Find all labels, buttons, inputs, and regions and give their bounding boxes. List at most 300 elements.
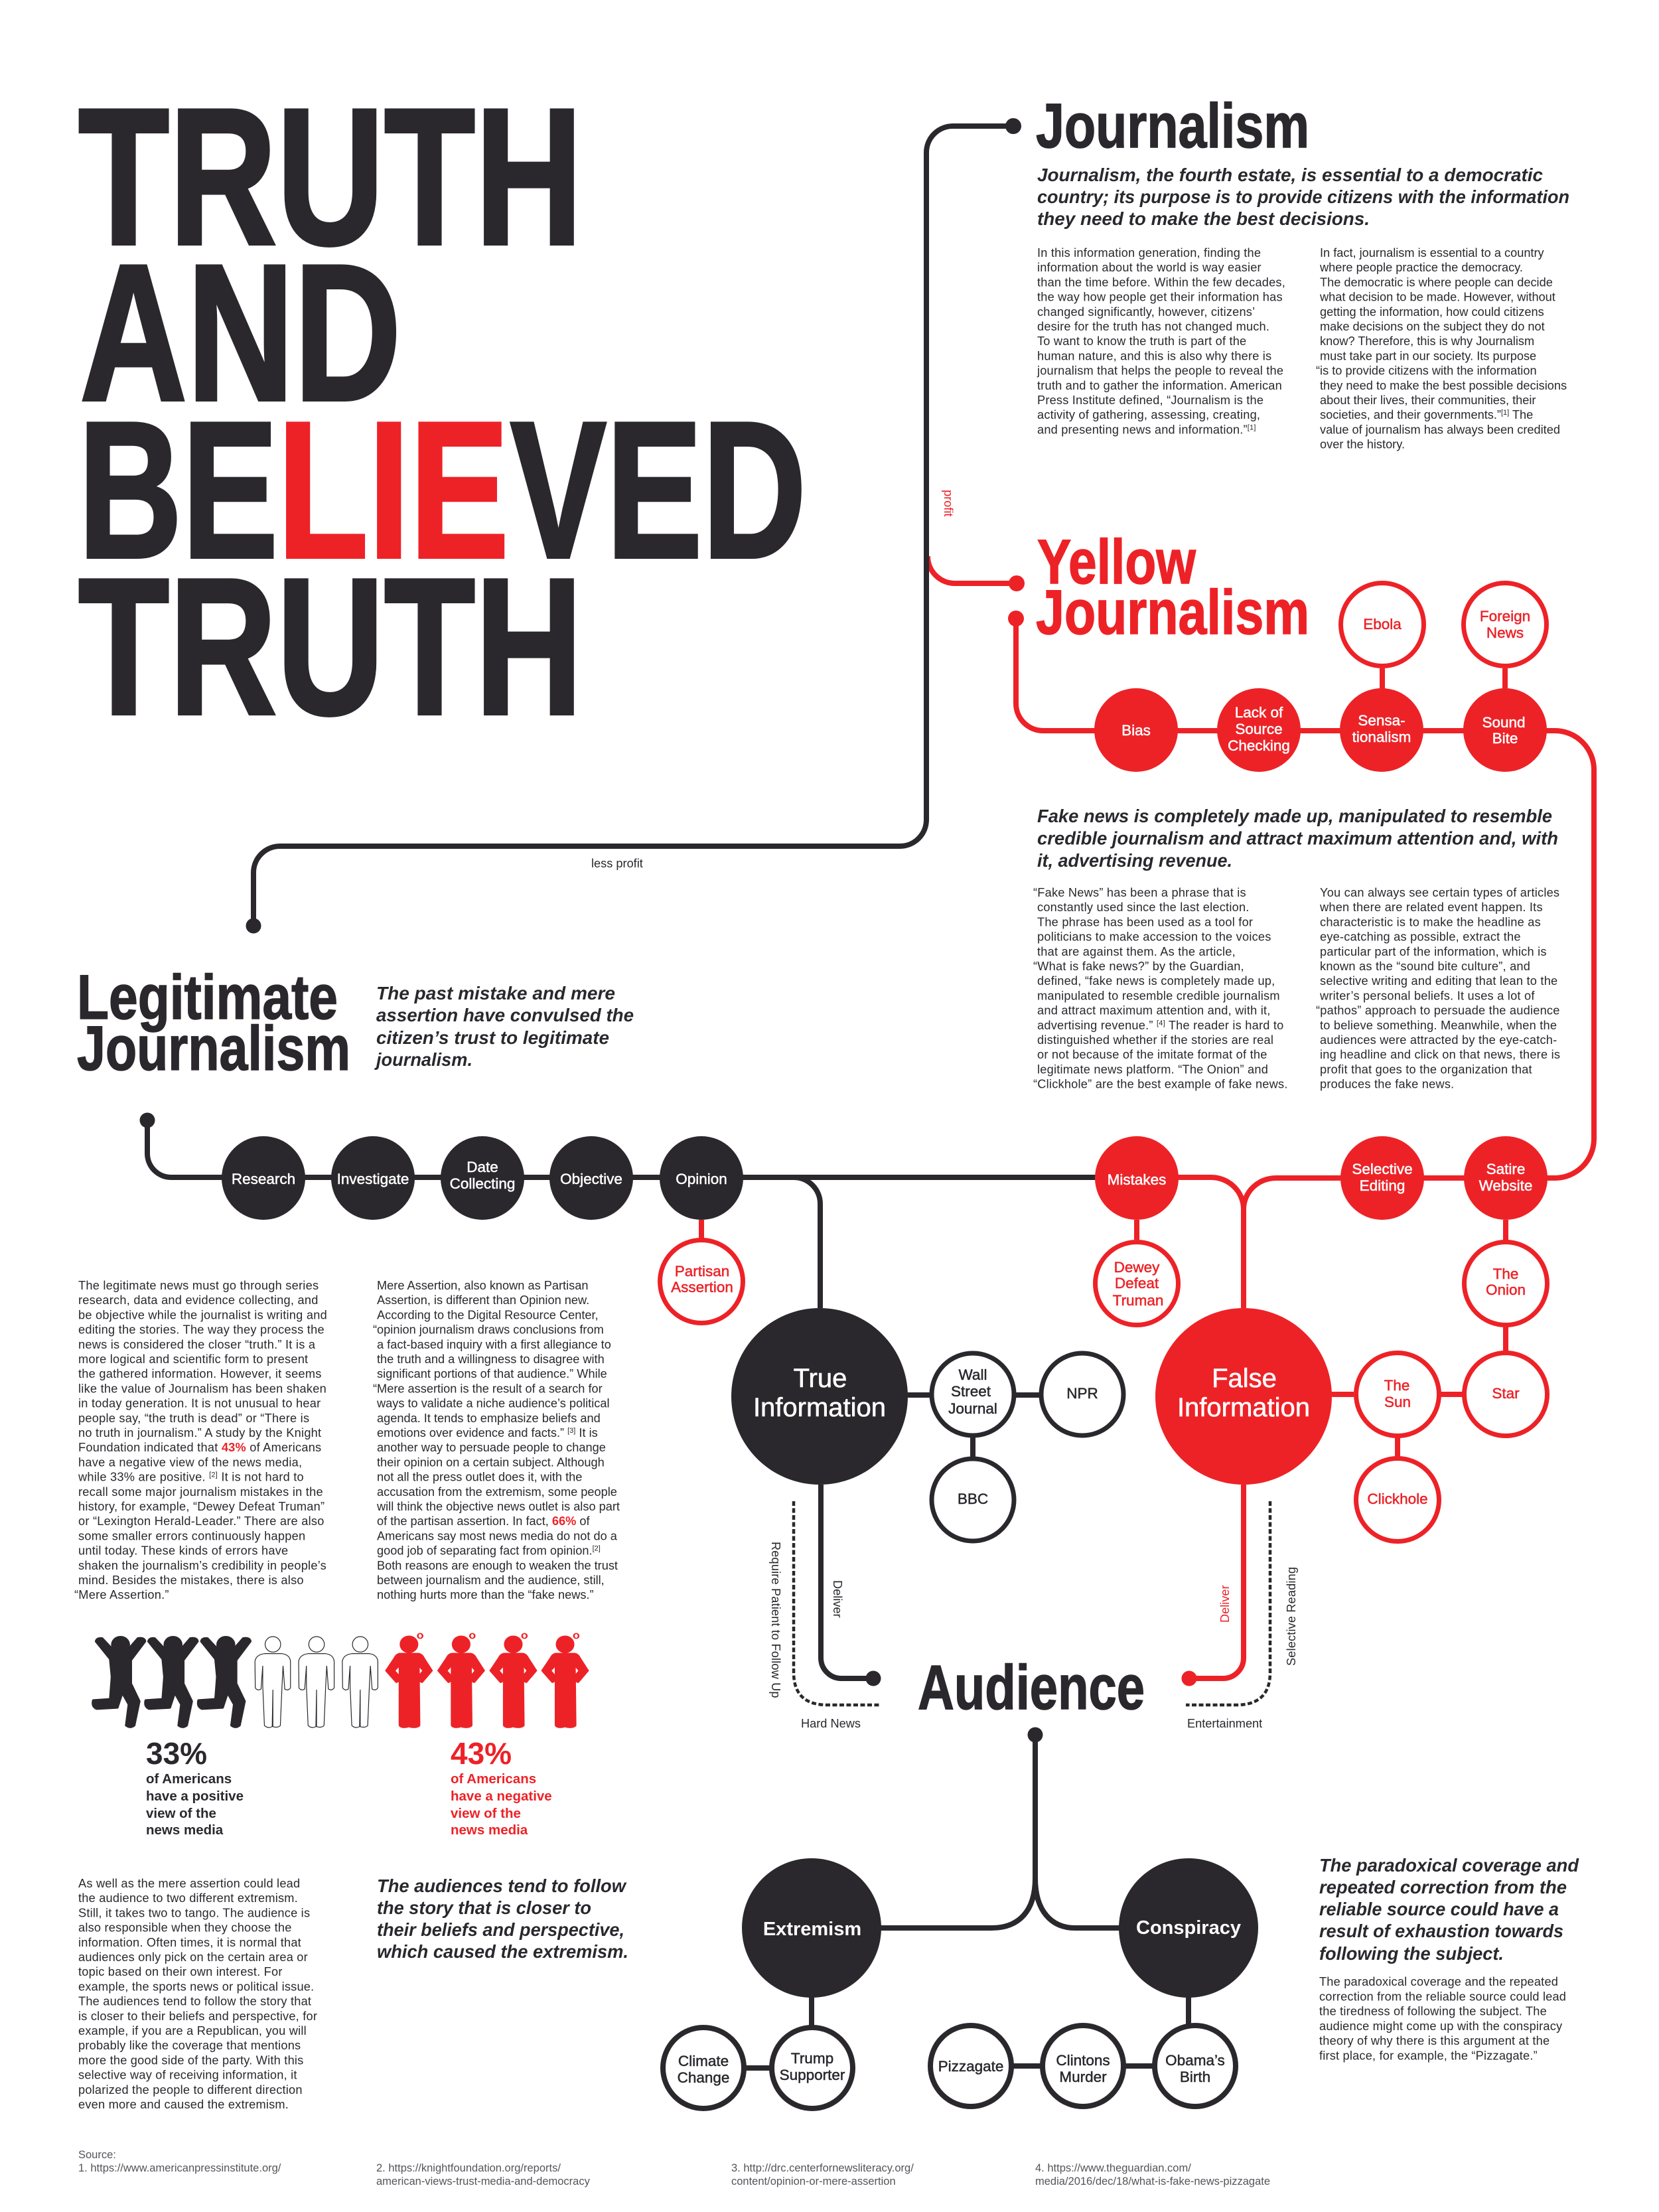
sources: four: media/2016/dec/18/what-is-fake-news-pizzagate [1035,2175,1270,2187]
pictogram: people icons [93,1633,588,1728]
text block: fake news column two: produces the fake news. [1320,1078,1454,1091]
text block: legitimate column two: Mere Assertion, also known as Partisan [377,1279,588,1292]
node: the onion: The [1493,1266,1518,1282]
text block: legitimate column one: research, data and evidence collecting, and [78,1293,319,1307]
node: conspiracy [1119,1858,1258,1998]
text block: fake news column one: The reader is hard to [1165,1019,1284,1032]
node: false information: False [1212,1364,1277,1393]
text block: fake news column one: advertising revenue.” [1037,1019,1284,1032]
intro: legitimate journalism: journalism. [374,1049,472,1070]
text block: legitimate column one: have a negative view of the news media, [78,1455,302,1469]
node: trump supporter: Supporter [780,2067,845,2083]
node: the sun: The [1384,1377,1409,1394]
text block: legitimate column one: the gathered information. However, it seems [78,1367,322,1380]
text block: fake news column one: constantly used since the last election. [1037,901,1250,914]
stat: 33 percent positive: have a positive [146,1789,244,1804]
node: sound bite [1463,688,1547,772]
text block: fake news column two: profit that goes to the organization that [1320,1063,1532,1076]
sources: four: 4. https://www.theguardian.com/ [1035,2162,1191,2174]
node: wall street journal [932,1353,1014,1436]
intro: journalism: Journalism, the fourth estate, is essential to a democratic [1037,165,1543,185]
node: climate change [663,2028,744,2108]
text block: fake news column one: that are against them. As the article, [1037,945,1236,958]
intro: legitimate journalism: The past mistake and mere [376,983,615,1003]
text block: journalism column two: getting the information, how could citizens [1320,305,1544,319]
text block: extremism explanation: example, if you are a Republican, you will [78,2024,307,2037]
text block: legitimate column one: [2] [209,1471,218,1479]
node: selective editing: Editing [1360,1177,1405,1194]
node: date collecting [441,1136,524,1220]
heading: legitimate journalism: Legitimate [77,962,338,1033]
text block: legitimate column two: nothing hurts more than the “fake news.” [377,1588,594,1601]
text block: journalism column two: where people practice the democracy. [1319,261,1523,274]
text block: legitimate column one: It is not hard to [218,1471,304,1484]
intro: legitimate journalism: citizen’s trust to legitimate [376,1027,609,1048]
node: false information [1155,1308,1332,1485]
text block: legitimate column two: good job of separating fact from opinion. [377,1544,601,1558]
arrow: true information to audience [821,1485,881,1686]
text block: conspiracy explanation: theory of why there is this argument at the [1319,2034,1550,2047]
node: dewey defeat truman: Dewey [1114,1259,1160,1276]
text block: extremism explanation: more the good side of the party. With this [78,2053,303,2067]
node: satire website [1464,1136,1548,1220]
arrow: black path through legitimate journalism row [139,1112,1137,1308]
text block: journalism column one: human nature, and this is also why there is [1037,349,1271,362]
node: investigate [331,1136,415,1220]
arrow: red path through yellow journalism and satire row [1008,611,1594,1308]
heading: legitimate journalism: Journalism [77,1013,350,1084]
text block: journalism column one: To want to know the truth is part of the [1037,334,1246,348]
sources: three: content/opinion-or-mere-assertion [731,2175,896,2187]
text block: legitimate column one: or “Lexington Herald-Leader.” There are also [78,1514,325,1528]
text block: journalism column one: Press Institute defined, “Journalism is the [1037,394,1263,407]
text block: legitimate column two: will think the objective news outlet is also part [376,1500,620,1513]
text block: journalism column two: they need to make the best possible decisions [1320,379,1567,392]
text block: legitimate column two: between journalism and the audience, still, [377,1574,605,1587]
text block: journalism column one: truth and to gather the information. American [1037,379,1282,392]
node: date collecting: Collecting [450,1175,515,1192]
node: foreign news: Foreign [1480,608,1530,625]
node: objective [549,1136,633,1220]
text block: fake news column one: and attract maximum attention and, with it, [1037,1004,1271,1017]
text block: journalism column two: value of journalism has always been credited [1320,423,1560,436]
text block: extremism explanation: As well as the mere assertion could lead [78,1877,300,1890]
heading: yellow journalism [1036,527,1309,648]
node: dewey defeat truman: Defeat [1115,1275,1159,1291]
node: research: Research [232,1171,295,1187]
node: obamas birth: Birth [1180,2069,1210,2085]
node: true information: Information [753,1393,886,1422]
label: entertainment: Entertainment [1187,1717,1262,1730]
text block: fake news column two: particular part of the information, which is [1320,945,1547,958]
node: trump supporter [772,2028,853,2108]
text block: legitimate column one: Foundation indicated that 43% of Americans [78,1441,321,1454]
text block: fake news column two: to believe something. Meanwhile, when the [1320,1019,1557,1032]
text block: legitimate column two: agenda. It tends to emphasize beliefs and [377,1412,601,1425]
text block: extremism explanation: probably like the coverage that mentions [78,2039,301,2052]
row: yellow journalism nodes [1094,583,1547,772]
intro: extremism [377,1876,628,1962]
label: less profit: less profit [591,857,643,870]
node: sensationalism: tionalism [1352,729,1411,745]
text block: legitimate column two: a fact-based inquiry with a first allegiance to [377,1338,611,1351]
heading: yellow journalism: Journalism [1036,577,1309,648]
node: opinion: Opinion [676,1171,727,1187]
label: deliver red: Deliver [1218,1585,1232,1623]
node: false information: Information [1177,1393,1310,1422]
intro: fake news: credible journalism and attract maximum attention and, with [1037,828,1558,848]
node: wall street journal: Street [951,1383,991,1400]
intro: legitimate journalism: assertion have convulsed the [376,1005,634,1025]
text block: legitimate column two: [2] [593,1545,601,1553]
title: LIE [277,382,509,599]
stat: 33 percent positive: 33% [146,1736,207,1771]
label: require patient to follow up: Require Patient to Follow Up [769,1542,782,1698]
text block: extremism explanation: topic based on their own interest. For [78,1965,283,1978]
stat: 43 percent negative: have a negative [451,1789,552,1804]
row: legitimate journalism nodes [222,1136,743,1220]
connectors: red stems [701,1220,1506,1460]
node: clickhole: Clickhole [1367,1491,1428,1507]
text block: journalism column two: over the history. [1320,438,1405,451]
node: sound bite: Bite [1492,730,1518,747]
title: BE [78,382,278,599]
text block: extremism explanation: even more and caused the extremism. [78,2098,289,2111]
node: selective editing: Selective [1352,1161,1413,1177]
sources: one: Source: [78,2149,116,2161]
node: lack of source checking: Lack of [1235,704,1283,721]
text block: conspiracy explanation: The paradoxical coverage and the repeated [1319,1975,1558,1988]
text block: fake news column two: audiences were attracted by the eye-catch- [1320,1033,1557,1047]
text block: journalism column one: [1] [1248,423,1256,431]
sources: two: 2. https://knightfoundation.org/reports/ [376,2162,561,2174]
text block: journalism column one: and presenting news and information.” [1037,423,1256,436]
text block: legitimate column two: According to the Digital Resource Center, [377,1308,599,1321]
node: sound bite: Sound [1482,714,1526,731]
text block: extremism explanation: example, the sports news or political issue. [78,1980,314,1993]
text block: journalism column one: desire for the truth has not changed much. [1037,320,1269,333]
text block: fake news column one: [4] [1157,1019,1165,1027]
label: selective reading: Selective Reading [1285,1567,1298,1666]
text block: legitimate column one: like the value of Journalism has been shaken [78,1382,326,1395]
heading: legitimate journalism [77,962,350,1084]
node: partisan assertion [660,1240,743,1323]
node: bias: Bias [1121,722,1151,739]
sources: true information [932,1353,1123,1541]
node: wall street journal: Journal [948,1400,997,1417]
node: clintons murder: Murder [1059,2069,1107,2085]
sources: three: 3. http://drc.centerfornewsliteracy.org/ [731,2162,914,2174]
node: dewey defeat truman [1095,1242,1179,1325]
text block: extremism explanation: information. Often times, it is normal that [78,1936,301,1949]
text block: journalism column one: journalism that helps the people to reveal the [1037,364,1283,378]
intro: extremism: The audiences tend to follow [377,1876,627,1896]
text block: journalism column two: “is to provide citizens with the information [1316,364,1537,378]
intro: journalism: they need to make the best decisions. [1037,208,1370,229]
label: deliver: Deliver [831,1580,844,1618]
text block: fake news column one: legitimate news platform. “The Onion” and [1037,1063,1268,1076]
node: star [1464,1353,1548,1436]
node: clickhole [1356,1459,1439,1541]
text block: extremism explanation: the audience to two different extremism. [78,1891,298,1905]
dashed path: hard news [794,1501,879,1705]
stat: 43 percent negative: of Americans [451,1771,536,1787]
text block: fake news column one: politicians to make accession to the voices [1037,930,1271,944]
node: foreign news [1464,583,1546,666]
node: climate change: Climate [678,2053,729,2069]
text block: legitimate column two: ways to validate a niche audience’s political [376,1397,609,1410]
stat: 33 percent positive: of Americans [146,1771,232,1787]
stat: 43 percent negative: news media [451,1822,528,1838]
text block: fake news column two: characteristic is to make the headline as [1320,915,1541,928]
sources: one: 1. https://www.americanpressinstitute.org/ [78,2162,281,2174]
text block: legitimate column two: of the partisan assertion. In fact, 66% of [377,1514,590,1528]
text block: fake news column one: distinguished whether if the stories are real [1037,1033,1273,1047]
nodes: conspiracy examples [930,2026,1236,2106]
text block: journalism column one: changed significantly, however, citizens’ [1037,305,1255,319]
text block: journalism column two: The democratic is where people can decide [1320,275,1553,289]
text block: extremism explanation: is closer to their beliefs and perspective, for [78,2010,317,2023]
node: ebola: Ebola [1363,616,1402,632]
intro: conspiracy: repeated correction from the [1319,1877,1567,1897]
arrow: profit path to yellow journalism [928,556,1025,591]
text block: conspiracy explanation: audience might come up with the conspiracy [1319,2020,1563,2033]
node: obamas birth [1155,2026,1236,2106]
text block: extremism explanation: polarized the people to different direction [78,2083,303,2097]
text block: legitimate column one: more logical and scientific form to present [78,1353,308,1366]
stat: 33 percent positive: view of the [146,1806,216,1821]
text block: legitimate column one: editing the stories. The way they process the [78,1323,325,1337]
text block: legitimate column two: Both reasons are enough to weaken the trust [377,1559,618,1572]
text block: journalism column two: societies, and their governments.” [1320,408,1533,421]
text block: legitimate column one: The legitimate news must go through series [78,1279,319,1292]
text block: legitimate column two: not all the press outlet does it, with the [377,1471,582,1484]
row: red nodes [1095,1136,1548,1541]
node: extremism [742,1858,881,1998]
node: partisan assertion: Partisan [675,1263,729,1280]
text block: legitimate column one: in today generation. It is not unusual to hear [78,1397,321,1410]
text block: extremism explanation: also responsible when they choose the [78,1921,292,1935]
node: ebola [1340,583,1424,666]
text block: legitimate column one: news is considered the closer “truth.” It is a [78,1338,316,1351]
intro: conspiracy: following the subject. [1319,1943,1504,1964]
text block: fake news column one: “What is fake news?” by the Guardian, [1033,960,1244,973]
text block: conspiracy explanation: the tiredness of following the subject. The [1319,2005,1547,2018]
text block: legitimate column two: Assertion, is different than Opinion new. [377,1293,589,1307]
dashed path: entertainment [1186,1501,1270,1705]
text block: journalism column two: must take part in our society. Its purpose [1320,349,1536,362]
stat: 43 percent negative: view of the [451,1806,521,1821]
node: lack of source checking: Source [1235,721,1283,737]
text block: legitimate column one: shaken the journalism’s credibility in people’s [78,1559,326,1572]
intro: extremism: which caused the extremism. [377,1941,628,1962]
heading: audience: Audience [918,1653,1145,1723]
node: wall street journal: Wall [959,1366,987,1383]
node: the onion [1464,1242,1548,1325]
text block: legitimate column one: be objective while the journalist is writing and [78,1308,327,1321]
text block: legitimate column one: no truth in journalism.” A study by the Knight [78,1426,321,1439]
sources: two: american-views-trust-media-and-democracy [376,2175,591,2187]
text block: journalism column two: about their lives, their communities, their [1320,394,1536,407]
text block: legitimate column two: their opinion on a certain subject. Although [377,1455,605,1469]
text block: legitimate column two: “opinion journalism draws conclusions from [373,1323,604,1337]
stat: 33 percent positive: news media [146,1822,224,1838]
intro: journalism [1037,165,1569,229]
intro: legitimate journalism [374,983,634,1070]
text block: fake news column two: writer’s personal beliefs. It uses a lot of [1319,989,1535,1002]
arrow: audience fork to extremism and conspiracy [863,1727,1141,1928]
node: selective editing [1340,1136,1424,1220]
text block: extremism explanation: audiences only pick on the certain area or [78,1951,308,1964]
stat: 33 percent positive [146,1736,244,1838]
text block: fake news column two: when there are related event happen. Its [1319,901,1543,914]
node: bbc [932,1459,1014,1541]
text block: fake news column one: “Fake News” has been a phrase that is [1033,886,1246,899]
intro: fake news: Fake news is completely made up, manipulated to resemble [1037,806,1552,826]
node: satire website: Website [1479,1177,1532,1194]
text block: conspiracy explanation: first place, for example, the “Pizzagate.” [1319,2049,1538,2063]
text block: journalism column two: know? Therefore, this is why Journalism [1320,334,1534,348]
text block: legitimate column two: another way to persuade people to change [377,1441,606,1454]
text block: journalism column two: make decisions on the subject they do not [1320,320,1545,333]
text block: legitimate column two: [3] [567,1427,575,1435]
text block: fake news column one: manipulated to resemble credible journalism [1037,989,1280,1002]
node: bbc: BBC [958,1491,988,1507]
text block: fake news column one: The phrase has been used as a tool for [1037,915,1253,928]
text block: journalism column one: activity of gathering, assessing, creating, [1037,408,1260,421]
node: conspiracy: Conspiracy [1136,1917,1241,1939]
node: climate change: Change [678,2069,729,2086]
text block: fake news column one: “Clickhole” are the best example of fake news. [1033,1078,1288,1091]
node: clintons murder: Clintons [1056,2052,1110,2069]
text block: journalism column two: The [1509,408,1533,421]
intro: extremism: the story that is closer to [377,1897,591,1918]
node: dewey defeat truman: Truman [1113,1292,1163,1309]
node: sensationalism: Sensa- [1358,712,1406,729]
text block: legitimate column one: mind. Besides the mistakes, there is also [78,1574,304,1587]
intro: fake news [1037,806,1558,871]
text block: legitimate column two: “Mere assertion is the result of a search for [373,1382,603,1395]
node: date collecting: Date [467,1159,498,1175]
icons: three outline people [255,1637,378,1728]
text block: legitimate column two: significant portions of that audience.” While [377,1367,607,1380]
text block: journalism column one: than the time before. Within the few decades, [1037,275,1285,289]
node: extremism: Extremism [763,1919,861,1940]
text block: fake news column two: ing headline and click on that news, there is [1320,1048,1560,1061]
text block: journalism column one: the way how people get their information has [1037,291,1283,304]
node: lack of source checking: Checking [1228,737,1290,754]
text block: conspiracy explanation: correction from the reliable source could lead [1319,1990,1566,2003]
text block: legitimate column two: emotions over evidence and facts.” [377,1426,598,1439]
title: TRUTH [78,539,583,755]
text block: journalism column one: In this information generation, finding the [1037,246,1261,259]
arrow: less profit path to journalism [246,118,1021,933]
text block: extremism explanation: selective way of receiving information, it [78,2069,297,2082]
text block: legitimate column one: “Mere Assertion.” [74,1588,169,1601]
intro: fake news: it, advertising revenue. [1037,850,1232,871]
node: opinion [660,1136,743,1220]
text block: fake news column two: eye-catching as possible, extract the [1320,930,1521,944]
text block: legitimate column two: accusation from the extremism, some people [377,1485,617,1499]
node: lack of source checking [1217,688,1301,772]
node: trump supporter: Trump [791,2050,833,2067]
text block: journalism column one: information about the world is way easier [1037,261,1262,274]
text block: extremism explanation: Still, it takes two to tango. The audience is [78,1906,310,1919]
intro: conspiracy: result of exhaustion towards [1319,1921,1563,1941]
node: npr [1041,1353,1123,1436]
text block: legitimate column one: some smaller errors continuously happen [78,1529,305,1542]
intro: extremism: their beliefs and perspective, [377,1919,624,1940]
title: TRUTH [78,69,583,285]
icons: three jumping people [93,1637,250,1727]
node: true information [731,1308,908,1485]
text block: extremism explanation: The audiences tend to follow the story that [78,1995,311,2008]
intro: conspiracy: The paradoxical coverage and [1319,1855,1579,1876]
node: sensationalism [1340,688,1423,772]
heading: journalism: Journalism [1036,91,1309,161]
arrow: false information to audience [1181,1485,1244,1686]
text block: legitimate column two: the truth and a willingness to disagree with [377,1353,605,1366]
title [78,69,806,755]
node: clintons murder [1043,2026,1123,2106]
node: pizzagate [930,2026,1011,2106]
connectors: true information sources [820,1394,1082,1500]
node: true information: True [794,1364,847,1393]
text block: fake news column two: known as the “sound bite culture”, and [1320,960,1530,973]
node: pizzagate: Pizzagate [938,2058,1003,2075]
node: objective: Objective [560,1171,622,1187]
intro: conspiracy: reliable source could have a [1319,1899,1559,1919]
node: mistakes: Mistakes [1108,1171,1166,1188]
title: VED [510,382,806,599]
text block: legitimate column two: It is [575,1426,598,1439]
node: obamas birth: Obama’s [1165,2052,1225,2069]
text block: legitimate column one: recall some major journalism mistakes in the [78,1485,323,1499]
text block: legitimate column one: people say, “the truth is dead” or “There is [78,1412,309,1425]
node: the sun [1356,1353,1439,1436]
node: the sun: Sun [1384,1394,1411,1410]
node: npr: NPR [1066,1385,1098,1402]
node: star: Star [1492,1385,1520,1402]
text block: legitimate column one: until today. These kinds of errors have [78,1544,288,1558]
node: mistakes [1095,1136,1179,1220]
intro: conspiracy [1319,1855,1579,1964]
node: foreign news: News [1486,625,1524,641]
text block: journalism column two: [1] [1501,409,1509,417]
text block: legitimate column one: while 33% are positive. [78,1471,304,1484]
text block: fake news column one: defined, “fake news is completely made up, [1037,974,1275,988]
label: hard news: Hard News [801,1717,861,1730]
text block: legitimate column one: history, for example, “Dewey Defeat Truman” [78,1500,325,1513]
text block: fake news column two: You can always see certain types of articles [1320,886,1559,899]
node: investigate: Investigate [337,1171,409,1187]
stat: 43 percent negative: 43% [451,1736,512,1771]
label: profit: profit [942,490,955,516]
text block: fake news column two: “pathos” approach to persuade the audience [1316,1004,1560,1017]
node: the onion: Onion [1486,1282,1526,1298]
text block: journalism column two: what decision to be made. However, without [1319,291,1555,304]
icons: four angry people [386,1633,588,1728]
text block: legitimate column two: Americans say most news media do not do a [377,1529,618,1542]
heading: yellow journalism: Yellow [1037,527,1196,597]
node: satire website: Satire [1486,1161,1525,1177]
text block: journalism column two: In fact, journalism is essential to a country [1320,246,1545,259]
title: AND [80,224,401,442]
intro: journalism: country; its purpose is to provide citizens with the information [1037,186,1569,207]
node: bias [1094,688,1178,772]
node: research [222,1136,305,1220]
stat: 43 percent negative [451,1736,552,1838]
